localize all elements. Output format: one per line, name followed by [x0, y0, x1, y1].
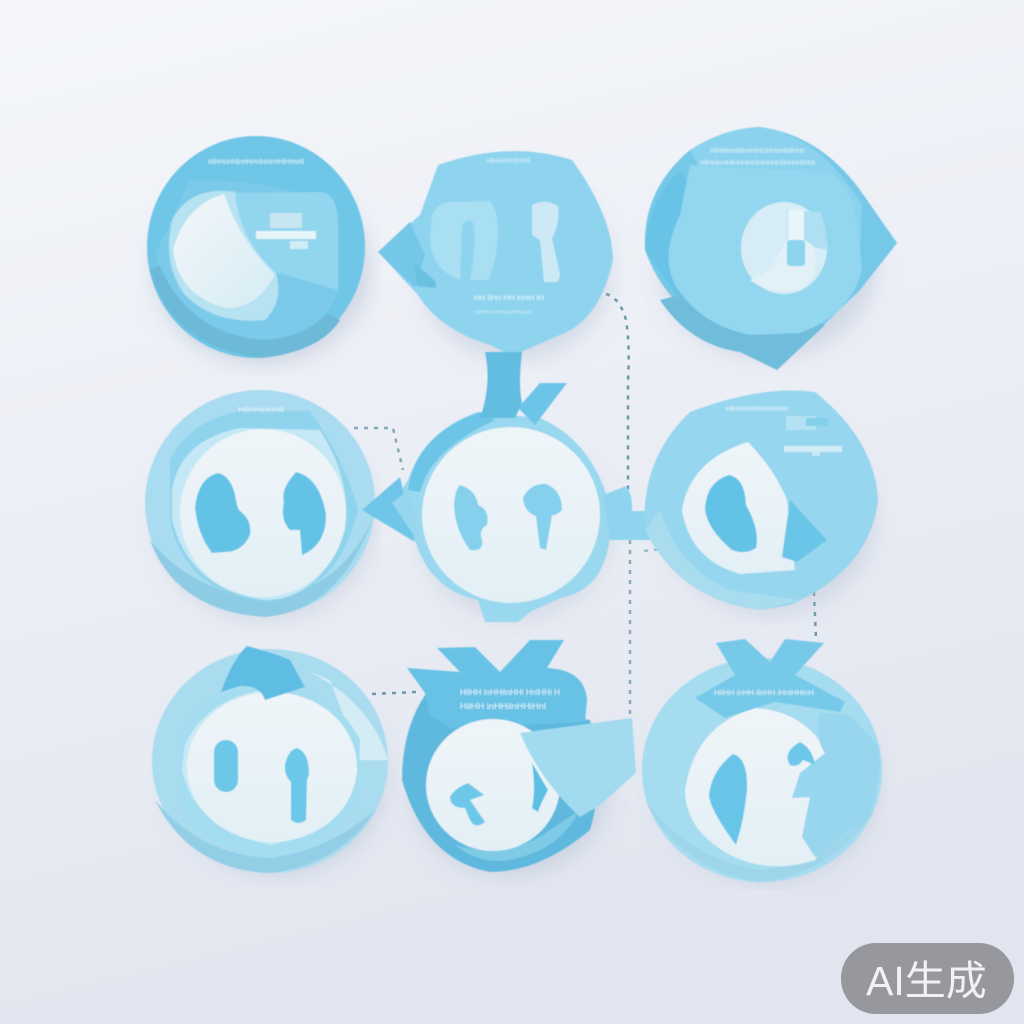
badge: AI generated [841, 943, 1014, 1014]
arrow: right connector [603, 482, 668, 540]
layer: scalloped ring [392, 412, 610, 622]
icon: mushroom [523, 484, 562, 550]
layer: light panel [669, 165, 862, 335]
panel: middle-center circle [362, 352, 668, 622]
layer: moon [173, 194, 275, 308]
label: HilHH inHH ilnHH iHnlHHinH [714, 690, 814, 697]
layer: ring [178, 687, 360, 858]
layer: lower pale ring [455, 810, 580, 861]
icon: oval [741, 202, 827, 294]
panel: top-right circle [645, 127, 897, 370]
icon: inner stem [787, 240, 805, 266]
layer: right panel [792, 713, 880, 857]
label: HilHHinHHilnHHiHnlHHinHHilHHnHil [208, 159, 304, 166]
label: HilHH inHHilnHHi HnlHHi H [460, 688, 560, 697]
icon: left kidney [454, 485, 488, 550]
label: HilHHinHHilnHHiHnlH [726, 406, 788, 413]
icon: kidney [705, 475, 757, 552]
icon: bars [256, 213, 316, 249]
icon: drop [788, 742, 815, 766]
panel: middle-right circle [645, 391, 878, 614]
icon: X ribbon band [695, 639, 845, 718]
layer: white window [685, 708, 830, 866]
label: HH ilHn HH inHH iH [474, 295, 544, 302]
icon: right kidney [283, 472, 326, 555]
panel: bottom-right circle [642, 639, 882, 882]
badge: AI generated: AI生成 [866, 958, 987, 1004]
layer: dark body [402, 695, 598, 872]
panel: middle-left circle [145, 390, 375, 620]
icon: left pill [214, 740, 238, 792]
layer: top band [407, 640, 587, 728]
arrow: V right [518, 383, 567, 425]
arrow: left tip [378, 222, 425, 288]
label: HilHHinHHil [238, 407, 285, 414]
panel: bottom-left circle [152, 646, 388, 875]
icon: left kidney [195, 473, 250, 553]
layer: white window [682, 442, 795, 574]
arrow fold [782, 500, 827, 562]
icon: left heart [450, 783, 485, 826]
panel: top-center circle [378, 151, 613, 360]
icon: right pill [285, 748, 309, 823]
arrow: left [362, 477, 415, 542]
layer: white window [426, 719, 560, 851]
label: HilHHinHHilnHHi [486, 158, 530, 165]
layer: moon ring [169, 191, 278, 321]
icon: bars [784, 416, 842, 456]
icon: fold [520, 718, 636, 817]
layer: inner ring [170, 411, 358, 602]
panel: bottom-center circle [402, 640, 636, 876]
label: HilHH inHHilnHHiHnl [460, 702, 546, 711]
icon: top fold [221, 646, 305, 700]
icon: left leaf [709, 754, 747, 845]
icon: left pill [430, 201, 498, 280]
label: HilHHinHHilnHHiHnlHHinHHilHHnHilHHi [700, 160, 815, 167]
label: HilHHinHHilnHHiHnl [474, 310, 532, 316]
icon: right drip [532, 763, 548, 812]
layer: right panel [235, 192, 338, 290]
label: HilHHinHHilnHHiHnlHHinHHilHHn [710, 148, 805, 155]
panel: top-left circle [147, 136, 370, 364]
icon: right pill [532, 202, 560, 282]
arrow: stem [480, 352, 522, 418]
dashed connectors [354, 294, 816, 740]
